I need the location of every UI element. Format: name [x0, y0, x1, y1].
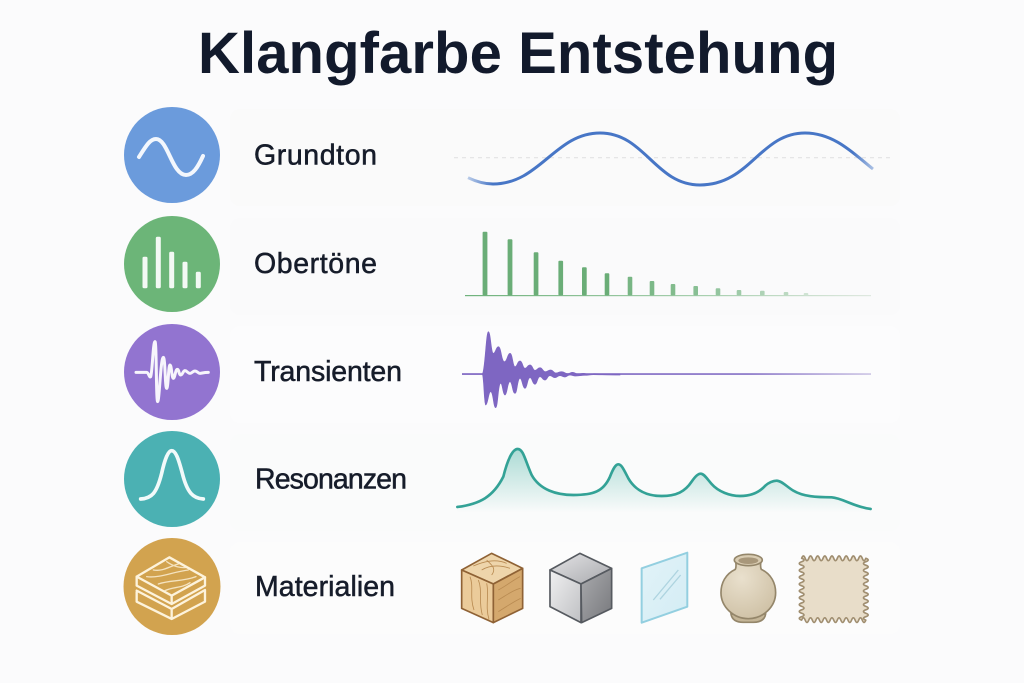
icon: wood layers — [124, 538, 220, 635]
icon: wood cube — [462, 553, 523, 623]
icon: harmonic bars — [124, 216, 220, 312]
icon: resonance bell curve — [124, 431, 220, 527]
icon: glass pane — [642, 553, 687, 623]
icon: metal cube — [550, 553, 612, 623]
row: Transienten — [124, 324, 871, 420]
icon: transient spike — [124, 324, 220, 420]
material icons — [462, 553, 868, 623]
icon: fabric swatch — [799, 556, 868, 622]
label: Grundton: Grundton — [254, 140, 377, 172]
row: Obertöne — [124, 216, 871, 312]
row: Grundton — [124, 107, 890, 203]
label: Materialien: Materialien — [255, 571, 395, 603]
chart: overtone spectrum — [465, 232, 871, 296]
label: Resonanzen: Resonanzen — [255, 464, 407, 496]
title: Klangfarbe Entstehung — [198, 21, 838, 86]
chart: decaying transient waveform — [462, 332, 871, 408]
label: Transienten: Transienten — [254, 356, 402, 388]
chart: resonance curve — [457, 449, 871, 513]
label: Obertöne: Obertöne — [254, 248, 377, 280]
row: Resonanzen — [124, 431, 871, 527]
chart: fundamental sine wave — [454, 133, 890, 185]
row: Materialien — [124, 538, 868, 635]
icon: sine wave — [124, 107, 220, 203]
icon: ceramic vase — [721, 554, 776, 622]
